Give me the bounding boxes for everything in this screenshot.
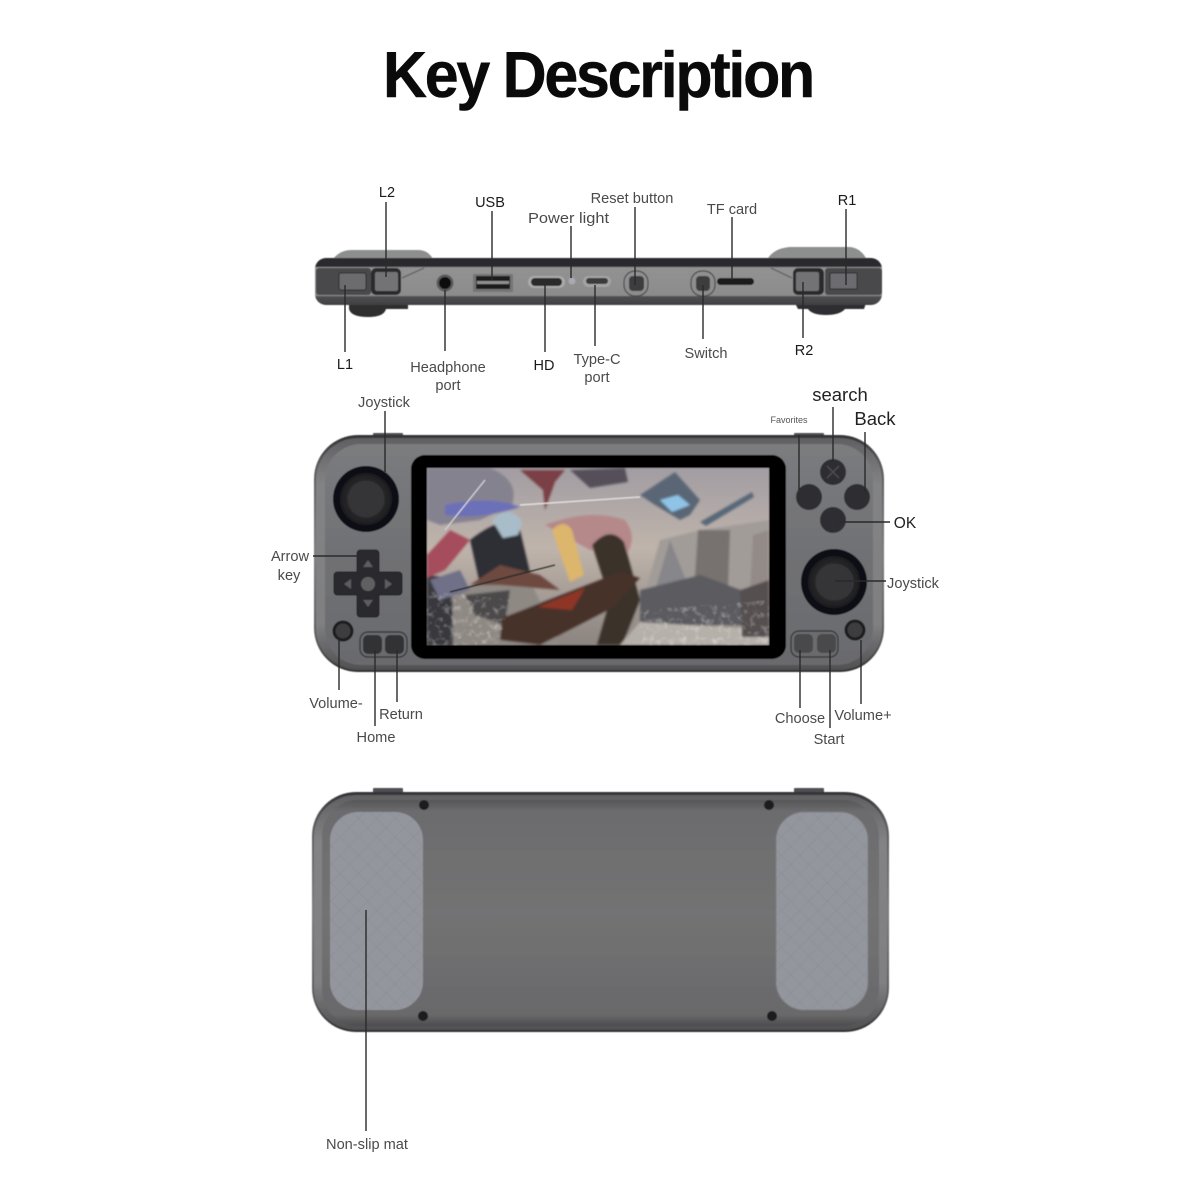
label: TF card <box>707 202 757 280</box>
label: Joystick right: Joystick <box>887 576 940 592</box>
title: Key Description <box>383 38 813 111</box>
label: L1: L1 <box>337 357 353 373</box>
front body <box>314 435 884 672</box>
label: Choose: Choose <box>775 711 825 727</box>
right joystick <box>801 549 867 615</box>
volume minus button <box>332 620 354 642</box>
label: Volume+ <box>834 640 892 724</box>
USB port <box>473 274 513 292</box>
non-slip mat left <box>330 812 423 1010</box>
label: Home: Home <box>357 730 395 746</box>
label: Switch: Switch <box>685 346 727 362</box>
left shoulder bump <box>333 250 433 259</box>
label: Non-slip mat: Non-slip mat <box>326 1137 408 1153</box>
label: Back <box>854 408 896 492</box>
edge body <box>315 258 882 305</box>
face buttons <box>796 459 870 533</box>
label: Return <box>379 650 423 723</box>
screws <box>418 800 777 1021</box>
label: Arrow key: Arrow <box>271 549 310 565</box>
label: USB: USB <box>475 195 505 211</box>
device: back view <box>312 788 889 1032</box>
label: Return: Return <box>379 707 423 723</box>
label: search <box>812 384 868 462</box>
TF card slot <box>717 278 754 285</box>
choose and start buttons <box>791 631 838 657</box>
label: L1 <box>337 285 353 373</box>
label: Choose <box>775 650 825 727</box>
label: Favorites <box>770 415 808 490</box>
label: Type-C port <box>573 285 621 386</box>
label: Headphone port: port <box>435 378 461 394</box>
label: USB <box>475 195 505 280</box>
screen bezel <box>411 455 786 659</box>
label: Favorites: Favorites <box>770 415 808 425</box>
L1 button <box>316 268 371 295</box>
label: HD <box>534 282 554 374</box>
label: search: search <box>812 384 868 405</box>
label: R2 <box>795 282 813 359</box>
label: Back: Back <box>854 408 896 429</box>
headphone port <box>436 274 454 292</box>
arrow key <box>334 550 402 617</box>
label: OK <box>838 515 917 532</box>
label: R1 <box>838 193 856 285</box>
label: Volume-: Volume- <box>309 696 363 712</box>
volume plus button <box>844 620 866 640</box>
label: Headphone port <box>410 290 486 394</box>
R1 button <box>825 268 882 295</box>
label: Switch <box>685 285 727 362</box>
right stick underside <box>795 303 866 315</box>
label: Headphone port: Headphone <box>410 360 486 376</box>
label: Start: Start <box>814 732 844 748</box>
reset button <box>624 271 648 296</box>
home and return buttons <box>360 632 407 657</box>
label: Start <box>814 650 844 748</box>
back body <box>312 792 889 1032</box>
label: R1: R1 <box>838 193 856 209</box>
shoulder tabs <box>373 788 824 796</box>
label: Home <box>357 650 395 746</box>
right shoulder bump <box>768 247 866 258</box>
device: top edge view <box>315 247 882 317</box>
label: Type-C port: port <box>584 370 610 386</box>
label: Joystick right <box>835 576 940 592</box>
label: Joystick left: Joystick <box>358 395 411 411</box>
label: R2: R2 <box>795 343 813 359</box>
HD port <box>528 276 565 288</box>
left stick underside <box>349 304 408 317</box>
label: Arrow key: key <box>278 568 301 584</box>
shoulder tabs <box>373 433 824 441</box>
screen artwork <box>427 468 769 645</box>
label: Volume+: Volume+ <box>834 708 892 724</box>
label: Joystick left <box>358 395 411 472</box>
label: Power light: Power light <box>528 211 609 227</box>
Type-C port <box>583 276 611 287</box>
label: TF card: TF card <box>707 202 757 218</box>
label: Power light <box>528 211 609 278</box>
label: Type-C port: Type-C <box>573 352 621 368</box>
label: Volume- <box>309 640 363 712</box>
label: L2 <box>379 185 395 277</box>
label: L2: L2 <box>379 185 395 201</box>
label: Reset button: Reset button <box>591 191 673 207</box>
L2 button <box>371 268 424 295</box>
label: OK: OK <box>894 515 917 532</box>
R2 button <box>771 268 824 295</box>
label: Arrow key <box>271 549 365 584</box>
non-slip mat right <box>776 812 868 1010</box>
label: HD: HD <box>534 358 554 374</box>
power light <box>568 278 576 284</box>
label: Reset button <box>591 191 673 285</box>
left joystick <box>333 466 399 532</box>
device: front view <box>314 433 884 672</box>
switch <box>691 271 715 296</box>
